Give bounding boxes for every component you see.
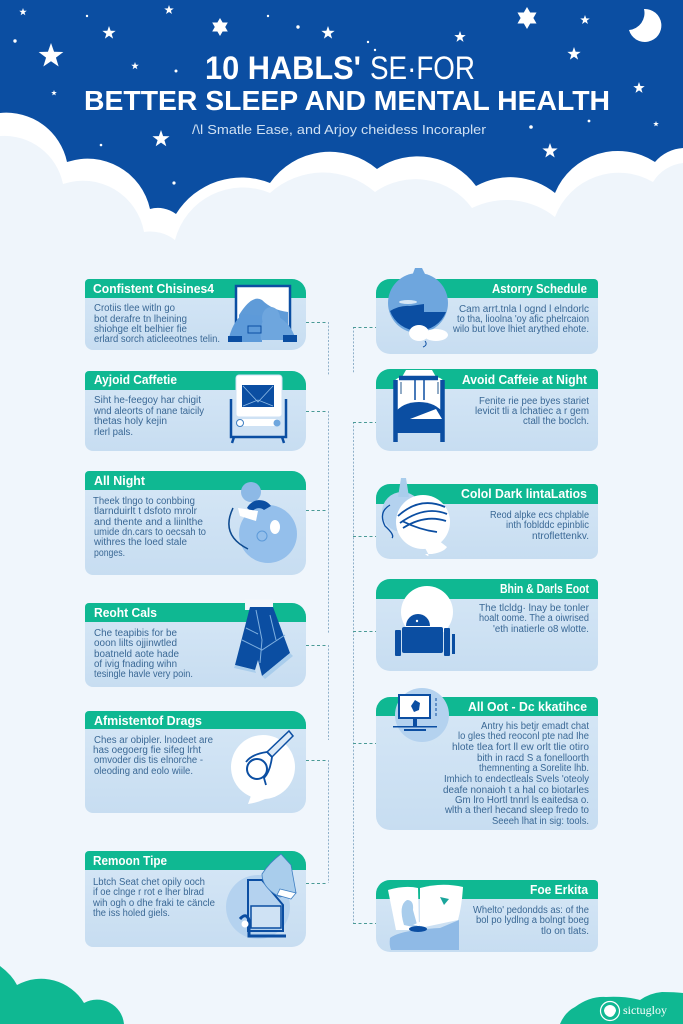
panel: astorry schedule xyxy=(376,268,598,354)
icon: folded jeans xyxy=(234,599,293,679)
body text: Siht he-feegoy har chigit xyxy=(94,395,201,406)
body text: Crotiis tlee witln go xyxy=(94,303,175,314)
body text: umide dn.cars to oecsah to xyxy=(94,527,206,538)
icon: moon and sofa xyxy=(395,586,455,656)
night sky header xyxy=(0,0,683,300)
panel: avoid caffeine at night xyxy=(376,369,598,451)
heading: Confistent Chisines4 xyxy=(93,281,215,296)
icon: sleeping head xyxy=(229,482,297,563)
heading: Colol Dark lintaLatios xyxy=(461,486,587,501)
icon: desk with leaf xyxy=(226,854,296,939)
body text: deafe nonaioh t a hal co biotarles xyxy=(443,785,589,796)
heading: Ayjoid Caffetie xyxy=(94,372,177,387)
body text xyxy=(443,721,589,827)
heading: Afmistentof Drags xyxy=(94,713,202,728)
body text: Che teapibis for be xyxy=(94,628,177,639)
panel: amount of drugs xyxy=(85,711,306,813)
body text: wlth a therl hecand sleep fredo to xyxy=(444,805,589,816)
title: SE·FOR xyxy=(370,50,475,86)
body text: bot derafre tn lheining xyxy=(94,314,187,325)
heading: Astorry Schedule xyxy=(492,281,587,296)
icon: monitor on stand xyxy=(231,375,286,443)
green cloud bottom right with logo xyxy=(560,992,683,1024)
body text: hoalt oome. The a oiwrised xyxy=(479,613,589,624)
body text: omvoder dis tis elnorche - xyxy=(94,755,203,766)
heading: Reoht Cals xyxy=(94,605,157,620)
body text xyxy=(490,510,589,542)
cloud divider xyxy=(0,113,683,340)
body text: withres the loed stale xyxy=(93,537,187,548)
heading: Foe Erkita xyxy=(530,882,589,897)
body text xyxy=(473,905,589,937)
body text: themnenting a Sorelite lhb. xyxy=(479,763,589,774)
body text: rlerl pals. xyxy=(94,427,133,438)
panel: recent cats xyxy=(85,599,306,687)
icon: brush in speech bubble xyxy=(231,731,295,804)
body text xyxy=(475,396,589,427)
body text xyxy=(93,735,213,777)
body text: levicit tli a lchatiec a r gem xyxy=(475,406,589,417)
heading: Remoon Tipe xyxy=(93,853,167,868)
logo: sictugloy xyxy=(623,1003,667,1017)
panel: bath and dark root xyxy=(376,579,598,671)
panel: remoon tipe xyxy=(85,851,306,947)
body text: Theek tlngo to conbbing xyxy=(93,496,195,507)
body text: Gm lro Hortl tnnrl ls eaitedsa o. xyxy=(455,795,589,806)
body text: erlard sorch aticleeotnes telin. xyxy=(94,334,220,345)
body text: wnd aleorts of nane taicily xyxy=(93,406,204,417)
body text: has oegoerg fie sifeg lrht xyxy=(93,745,201,756)
body text: of ivig fnading wihn xyxy=(94,659,177,670)
body text: Cam arrt.tnla l ognd l elndorlc xyxy=(459,304,589,315)
body text: to tha, lioolna 'oy afic phelrcaion xyxy=(457,314,589,325)
heading: All Oot - Dc kkatihce xyxy=(468,699,587,714)
panel: all night xyxy=(85,471,306,575)
body text: Antry his betjr emadt chat xyxy=(481,721,589,732)
body text: tesingle havle very poin. xyxy=(94,669,193,680)
body text: tlarnduirlt t dsfoto mrolr xyxy=(94,506,198,517)
body text: lo gles thed reoconl pte nad Ihe xyxy=(458,731,589,742)
panel: foe erkita xyxy=(376,880,598,952)
subtitle: /\l Smatle Ease, and Arjoy cheidess Incorapler xyxy=(192,122,487,137)
body text: oleoding and eolo wiile. xyxy=(94,766,193,777)
body text xyxy=(93,496,206,559)
heading: Avoid Caffeie at Night xyxy=(462,372,588,387)
body text: Reod alpke ecs chplable xyxy=(490,510,589,521)
icon: desktop monitor xyxy=(393,688,449,742)
body text: 'eth inatierle o8 wlotte. xyxy=(493,624,589,635)
icon: crescent moon xyxy=(629,9,661,42)
heading: All Night xyxy=(94,473,146,488)
heading: Bhin & Darls Eoot xyxy=(500,581,590,596)
body text: hlote tlea fort ll ew orlt tlie otiro xyxy=(452,742,589,753)
body text: Lbtch Seat chet opily ooch xyxy=(93,877,205,888)
title: 10 HABLS' xyxy=(205,50,361,86)
body text: the iss holed giels. xyxy=(93,908,170,919)
body text: Ches ar obipler. lnodeet are xyxy=(94,735,213,746)
body text xyxy=(92,877,215,919)
body text: wilo but love lhiet arythed ehote. xyxy=(452,324,589,335)
body text: if oe clnge r rot e lher blrad xyxy=(93,887,204,898)
body text: tlo on tlats. xyxy=(541,926,589,937)
body text xyxy=(479,603,590,635)
body text: wih ogh o dhe fraki te cäncle xyxy=(92,898,215,909)
body text: ooon lilts ojjinwtled xyxy=(94,638,177,649)
title: BETTER SLEEP AND MENTAL HEALTH xyxy=(84,85,610,116)
body text: Fenite rie pee byes stariet xyxy=(479,396,589,407)
body text: The tlcldg· lnay be tonler xyxy=(479,603,590,614)
body text: ntroflettenkv. xyxy=(532,531,589,542)
body text: shiohge elt belhier fie xyxy=(94,324,187,335)
icon: head with stripes xyxy=(382,478,450,556)
title xyxy=(84,50,610,116)
body text: Seeeh lhat in sig: tools. xyxy=(492,816,589,827)
body text: boatneld aote hade xyxy=(94,649,179,660)
panel: avoid caffeine xyxy=(85,371,306,451)
icon: person reading in bed xyxy=(388,885,463,950)
connector lines xyxy=(306,322,376,924)
body text: ponges. xyxy=(94,548,125,559)
body text: Whelto' pedondds as: of the xyxy=(473,905,589,916)
body text: bith in racd S a fonelloorth xyxy=(477,753,589,764)
body text: ctall the boclch. xyxy=(523,416,589,427)
body text: thetas holy kejin xyxy=(94,416,167,427)
icon: moon globe xyxy=(388,268,448,347)
icon: chair bed xyxy=(394,370,444,442)
body text: inth foblddc epinblic xyxy=(506,520,589,531)
body text: Imhich to endectleals Svels 'oteoly xyxy=(444,774,589,785)
body text: bol po lydlng a bolngt boeg xyxy=(476,915,589,926)
body text xyxy=(452,304,589,335)
panel: cool dark ventilation xyxy=(376,478,598,559)
panel: consistent schedule xyxy=(85,279,306,350)
green cloud bottom left xyxy=(0,966,124,1024)
panel: all out de-activate xyxy=(376,688,598,830)
icon: person at screen xyxy=(228,286,297,342)
body text xyxy=(94,628,193,680)
body text xyxy=(93,395,204,438)
body text xyxy=(94,303,220,345)
body text: and thente and a liinlthe xyxy=(94,517,203,528)
